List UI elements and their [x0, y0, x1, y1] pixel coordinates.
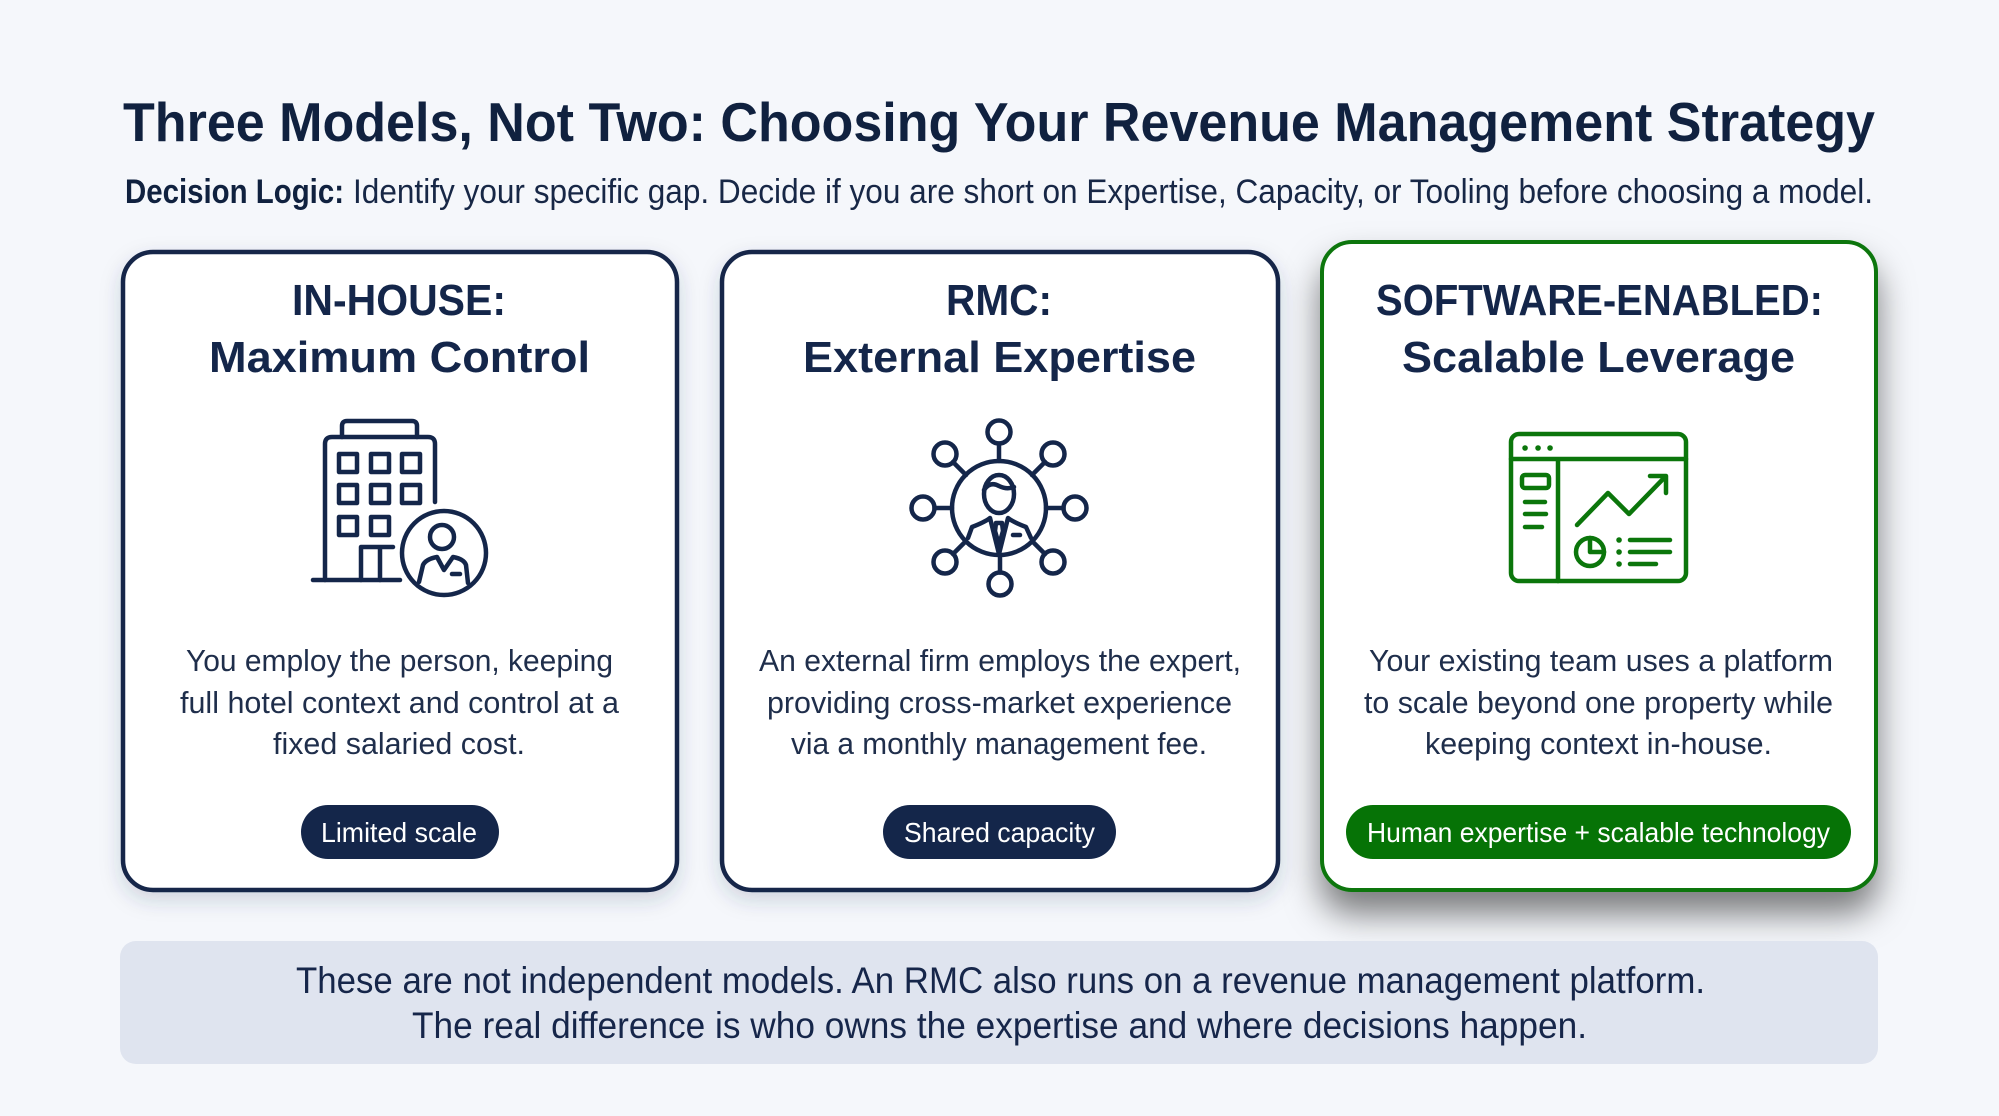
- icon: analytics dashboard: [1511, 434, 1686, 581]
- description: rmc: An external firm employs the expert,: [759, 643, 1241, 678]
- description: rmc: providing cross-market experience: [767, 685, 1232, 720]
- description: in-house: fixed salaried cost.: [273, 726, 525, 761]
- description: rmc: via a monthly management fee.: [791, 726, 1207, 761]
- subtitle: decision logic: Identify your specific gap. Decide if you are short on Expertise, Capacity, or Tooling before choosing a model.: [353, 173, 1873, 211]
- pill: shared capacity: Shared capacity: [904, 817, 1095, 848]
- pill: human expertise + scalable technology: [1346, 805, 1851, 859]
- description: software-enabled: to scale beyond one property while: [1364, 685, 1833, 720]
- panel: rmc: [722, 252, 1278, 890]
- heading: rmc: RMC:: [946, 276, 1052, 325]
- pill: limited scale: Limited scale: [321, 817, 477, 848]
- title: Three Models, Not Two: Choosing Your Revenue Management Strategy: [123, 91, 1875, 153]
- pill: limited scale: [301, 805, 499, 859]
- description: software-enabled: [1364, 643, 1833, 761]
- pill: human expertise + scalable technology: Human expertise + scalable technology: [1367, 817, 1830, 848]
- heading: software-enabled: SOFTWARE-ENABLED:: [1376, 276, 1823, 325]
- heading: in-house: IN-HOUSE:: [292, 276, 506, 325]
- heading: rmc: [803, 276, 1196, 382]
- callout banner: [120, 941, 1878, 1064]
- description: software-enabled: Your existing team uses a platform: [1369, 643, 1833, 678]
- heading: software-enabled: [1376, 276, 1823, 382]
- callout banner: The real difference is who owns the expertise and where decisions happen.: [412, 1005, 1587, 1046]
- icon: expert network: [912, 420, 1086, 596]
- heading: in-house: Maximum Control: [209, 333, 590, 382]
- pill: shared capacity: [883, 805, 1116, 859]
- subtitle: decision logic: Decision Logic:: [125, 173, 344, 211]
- description: in-house: [180, 643, 620, 761]
- heading: in-house: [209, 276, 590, 382]
- card frame: software-enabled: [1322, 242, 1876, 890]
- callout banner: These are not independent models. An RMC also runs on a revenue management platform.: [296, 960, 1705, 1001]
- description: rmc: [759, 643, 1241, 761]
- card frame: in-house: [123, 252, 677, 890]
- heading: rmc: External Expertise: [803, 333, 1196, 382]
- heading: software-enabled: Scalable Leverage: [1402, 333, 1795, 382]
- icon: hotel building with person: [313, 421, 486, 595]
- panel: in-house: [123, 252, 677, 890]
- card frame: rmc: [722, 252, 1278, 890]
- description: in-house: full hotel context and control at a: [180, 685, 620, 720]
- description: software-enabled: keeping context in-house.: [1425, 726, 1772, 761]
- description: in-house: You employ the person, keeping: [186, 643, 613, 678]
- panel: software-enabled: [1322, 242, 1876, 890]
